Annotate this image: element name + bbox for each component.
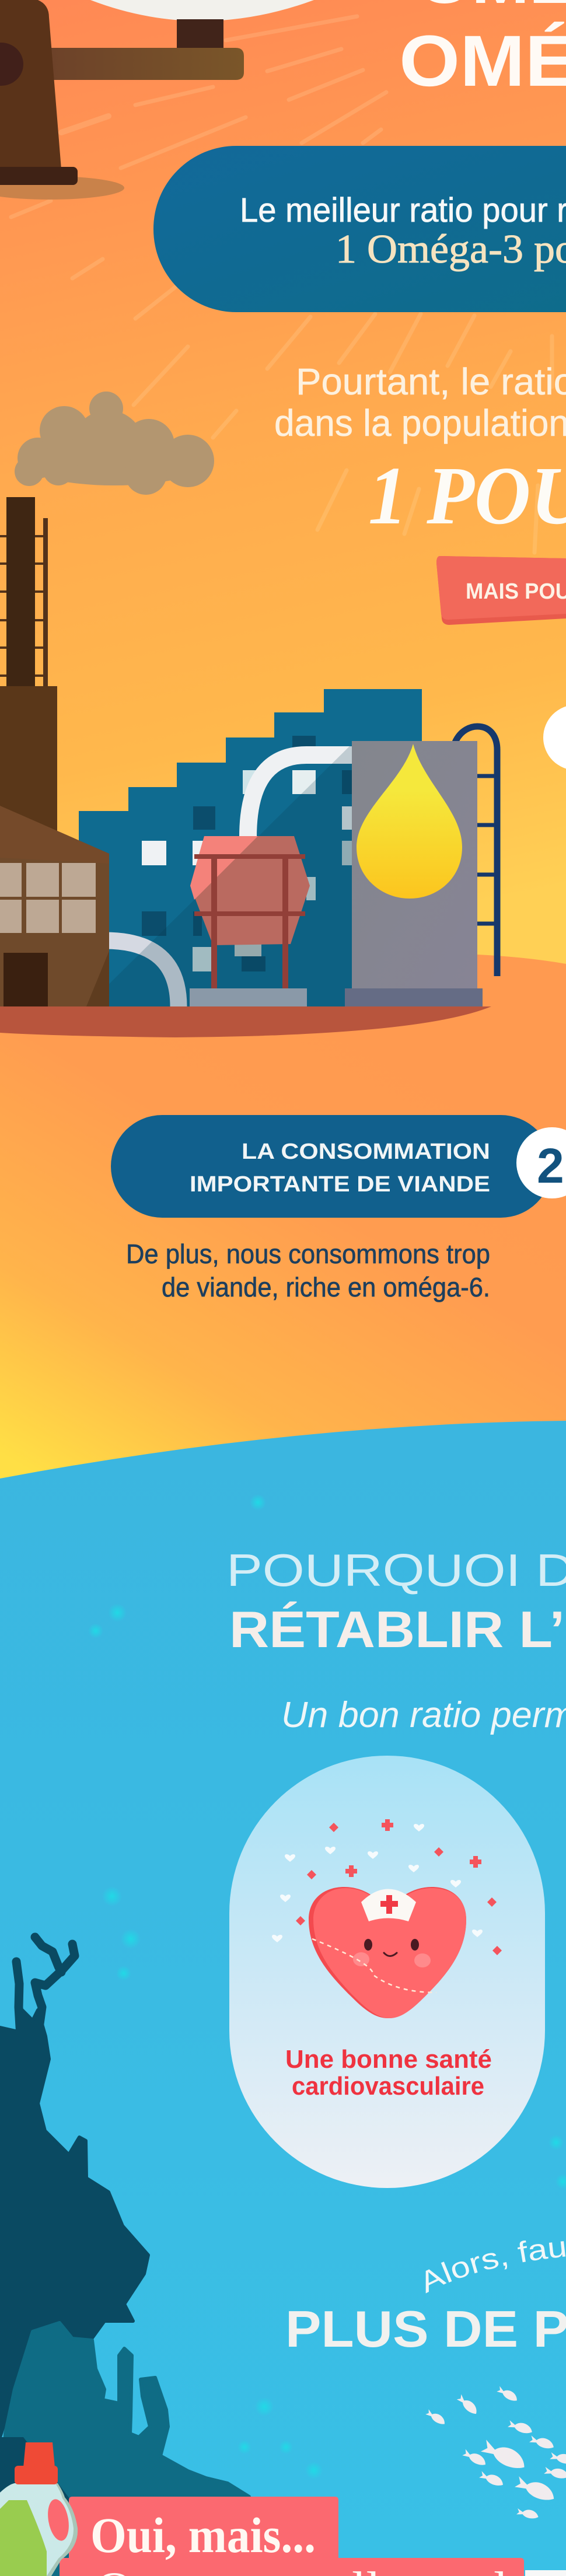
background: orange ground hill: [0, 955, 566, 1494]
heading: why restore balance: [226, 1544, 566, 1658]
ground shadow: [0, 1006, 491, 1037]
number badge 2: [516, 1127, 566, 1198]
illustration: factory: [0, 497, 497, 1037]
tower block: [0, 686, 57, 838]
text: pill heading: [190, 1140, 490, 1197]
background: orange sky: [0, 0, 566, 992]
sea bubbles: [0, 1494, 566, 2479]
title: omega heading (cropped): OMÉ: [399, 21, 566, 102]
blue stepped building: [79, 689, 422, 1006]
heading: why restore balance: POURQUOI D: [226, 1544, 566, 1596]
red boiler: [190, 836, 310, 1006]
text: benefit label: [285, 2045, 492, 2100]
diagonal building shade: [86, 746, 356, 1006]
text: benefit label: Une bonne santé: [285, 2045, 492, 2074]
grey storage tank: [352, 741, 477, 989]
reef dark base: [0, 2437, 73, 2509]
text: pill heading: LA CONSOMMATION: [242, 1140, 490, 1164]
illustration: teal reef: [0, 2323, 249, 2576]
heading: why restore balance: RÉTABLIR L’: [229, 1600, 565, 1658]
illustration: dark reef: [0, 2007, 148, 2437]
white panel corner: [525, 2570, 566, 2576]
text: one omega-3: 1 Oméga-3 po: [336, 227, 566, 272]
icon: nurse heart: [309, 1887, 466, 2018]
panel: benefit capsule: [229, 1756, 545, 2188]
text: benefit label: cardiovasculaire: [292, 2072, 484, 2100]
building windows: [142, 736, 354, 971]
illustration: windmill tower and white plate: [0, 0, 314, 200]
text: pill heading: IMPORTANTE DE VIANDE: [190, 1172, 490, 1197]
smoke cloud: [15, 392, 214, 495]
text: a good ratio allows: Un bon ratio perm: [281, 1695, 566, 1735]
panel: second cause pill: 2: [537, 1138, 564, 1193]
white number circle 1: [543, 705, 566, 770]
house door: [4, 953, 48, 1006]
text: yes but: Oui, mais...: [90, 2507, 316, 2563]
illustration: coral branches: [16, 1937, 75, 2036]
text: meat explanation: [126, 1239, 490, 1302]
decorative crosses: [296, 1819, 502, 1955]
house roof and walls: [0, 806, 109, 1006]
background: sea: [0, 1421, 566, 2576]
sun rays: [11, 16, 552, 553]
heading: more fish: PLUS DE P: [285, 2300, 566, 2358]
icon: detergent bottle: [0, 2442, 78, 2576]
text: cropped second line: [96, 2562, 508, 2576]
panel: second cause pill: [111, 1115, 566, 1218]
text: actual ratio intro: Pourtant, le ratio: [296, 361, 566, 403]
chimney ladder: [0, 518, 48, 686]
panel: best ratio pill: [153, 146, 566, 312]
text: actual ratio intro: [274, 361, 566, 444]
blue ladder: [455, 726, 497, 976]
illustration: school of fish: [424, 2386, 566, 2519]
text: meat explanation: De plus, nous consommons trop: [126, 1239, 490, 1269]
text: meat explanation: de viande, riche en oméga-6.: [162, 1272, 490, 1302]
callout: but red boxes: [60, 2497, 524, 2576]
chimney: [6, 497, 35, 686]
white pipes: [248, 755, 356, 837]
house windows: [0, 863, 96, 933]
icon: oil drop: [357, 744, 462, 899]
decorative small hearts: [272, 1824, 483, 1942]
callout button: why: [436, 556, 566, 625]
